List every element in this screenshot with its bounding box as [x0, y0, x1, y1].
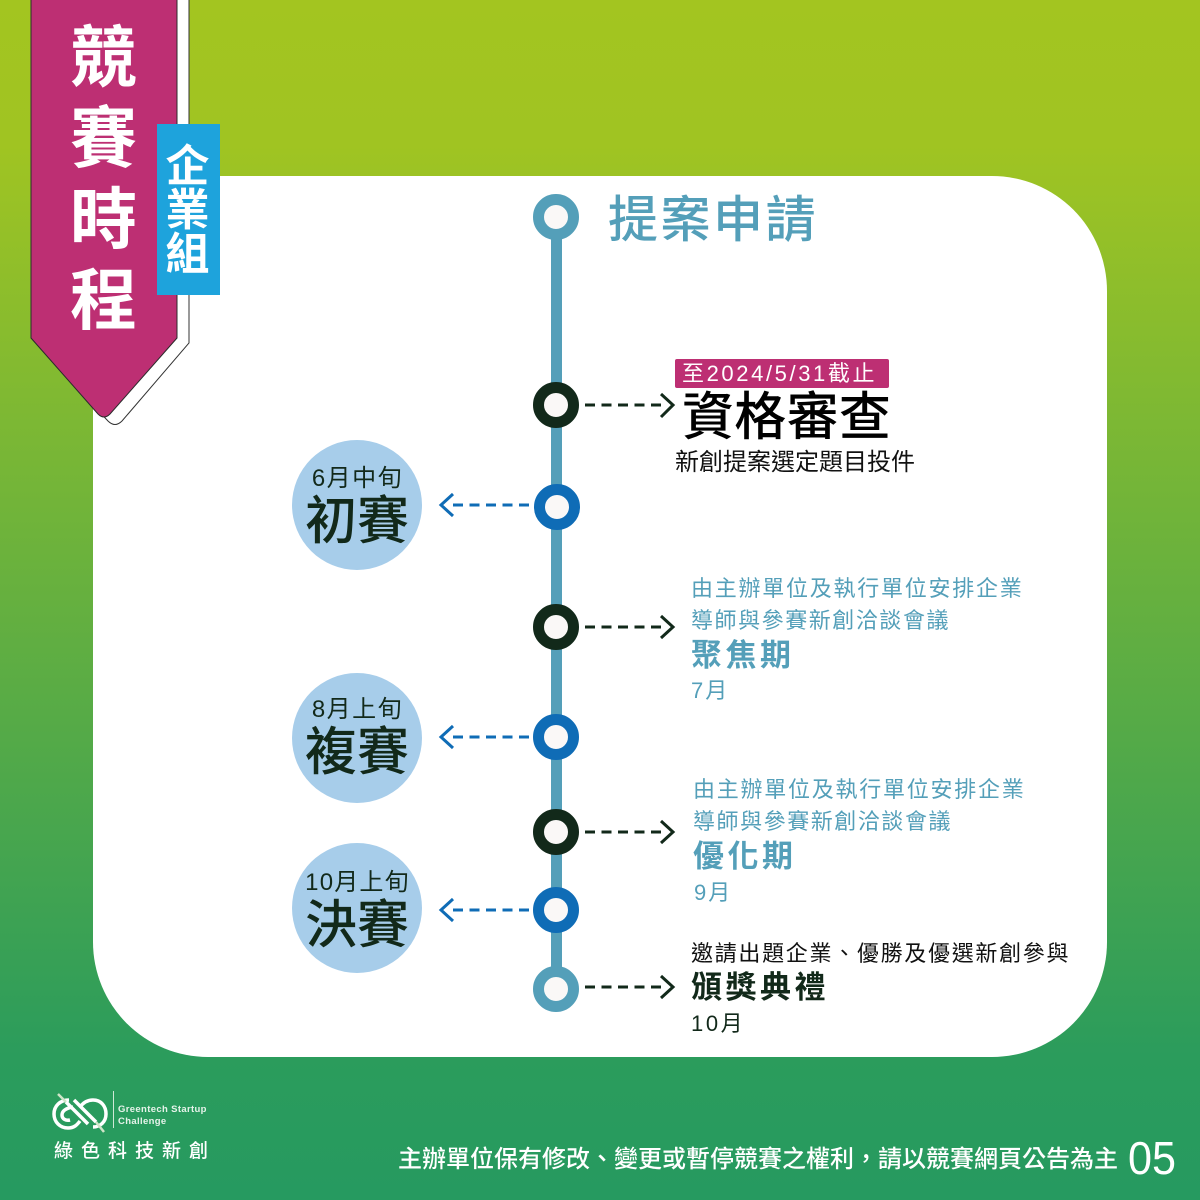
banner title text: 競	[70, 21, 137, 96]
category tag: enterprise group	[157, 124, 220, 295]
arrow	[585, 821, 673, 843]
step: preliminary	[292, 440, 574, 570]
step: proposal application: 提案申請	[608, 192, 818, 248]
title banner	[31, 0, 189, 424]
banner title text: 賽	[70, 102, 137, 177]
step: focus period: 7月	[691, 678, 729, 703]
step: award ceremony: 邀請出題企業、優勝及優選新創參與	[691, 941, 1070, 966]
date circle: 8月上旬	[312, 696, 403, 723]
step: focus period: 聚焦期	[691, 638, 794, 673]
arrow	[585, 616, 673, 638]
date circle	[292, 843, 422, 973]
step: award ceremony	[538, 941, 1070, 1036]
date circle: 初賽	[305, 493, 409, 551]
step: qualification review: 資格審查	[682, 389, 891, 447]
deadline tag: 至2024/5/31截止	[682, 361, 877, 386]
date circle: 6月中旬	[312, 465, 403, 492]
step: final	[292, 843, 574, 973]
banner title text: 程	[70, 264, 137, 339]
step: focus period	[538, 576, 1024, 703]
date circle	[292, 440, 422, 570]
timeline vertical line	[551, 217, 562, 989]
arrow	[585, 394, 673, 417]
step: award ceremony: 10月	[691, 1011, 745, 1036]
step: optimization period: 導師與參賽新創洽談會議	[693, 809, 952, 834]
step: qualification review: 新創提案選定題目投件	[675, 449, 915, 476]
date circle: 10月上旬	[305, 869, 410, 896]
banner title text	[70, 21, 137, 339]
date circle	[292, 673, 422, 803]
step: optimization period: 由主辦單位及執行單位安排企業	[693, 777, 1026, 802]
logo: Challenge	[118, 1116, 167, 1127]
step: qualification review	[538, 359, 915, 476]
arrow	[585, 976, 673, 998]
arrow	[441, 899, 529, 921]
step: award ceremony: 頒獎典禮	[691, 970, 829, 1005]
date circle: 決賽	[305, 897, 409, 955]
step: focus period: 導師與參賽新創洽談會議	[691, 608, 950, 633]
step: optimization period: 優化期	[693, 839, 796, 874]
page number: 05	[1128, 1132, 1176, 1184]
logo english text: Greentech Startup	[118, 1104, 207, 1115]
white content panel	[93, 176, 1107, 1057]
category tag: enterprise group: 組	[166, 230, 210, 279]
logo	[54, 1091, 216, 1162]
logo chinese text: 綠色科技新創	[54, 1140, 216, 1162]
arrow	[441, 726, 529, 748]
banner title text: 時	[70, 183, 137, 258]
arrow	[441, 494, 529, 516]
step: semifinal	[292, 673, 574, 803]
logo mark	[54, 1094, 106, 1132]
step: focus period: 由主辦單位及執行單位安排企業	[691, 576, 1024, 601]
logo divider	[113, 1091, 114, 1128]
date circle: 複賽	[305, 724, 409, 782]
category tag: enterprise group: 業	[166, 186, 210, 235]
step: optimization period	[538, 777, 1026, 905]
footer disclaimer: 主辦單位保有修改、變更或暫停競賽之權利，請以競賽網頁公告為主	[398, 1146, 1118, 1173]
step: optimization period: 9月	[694, 880, 732, 905]
category tag: enterprise group: 企	[166, 142, 210, 191]
